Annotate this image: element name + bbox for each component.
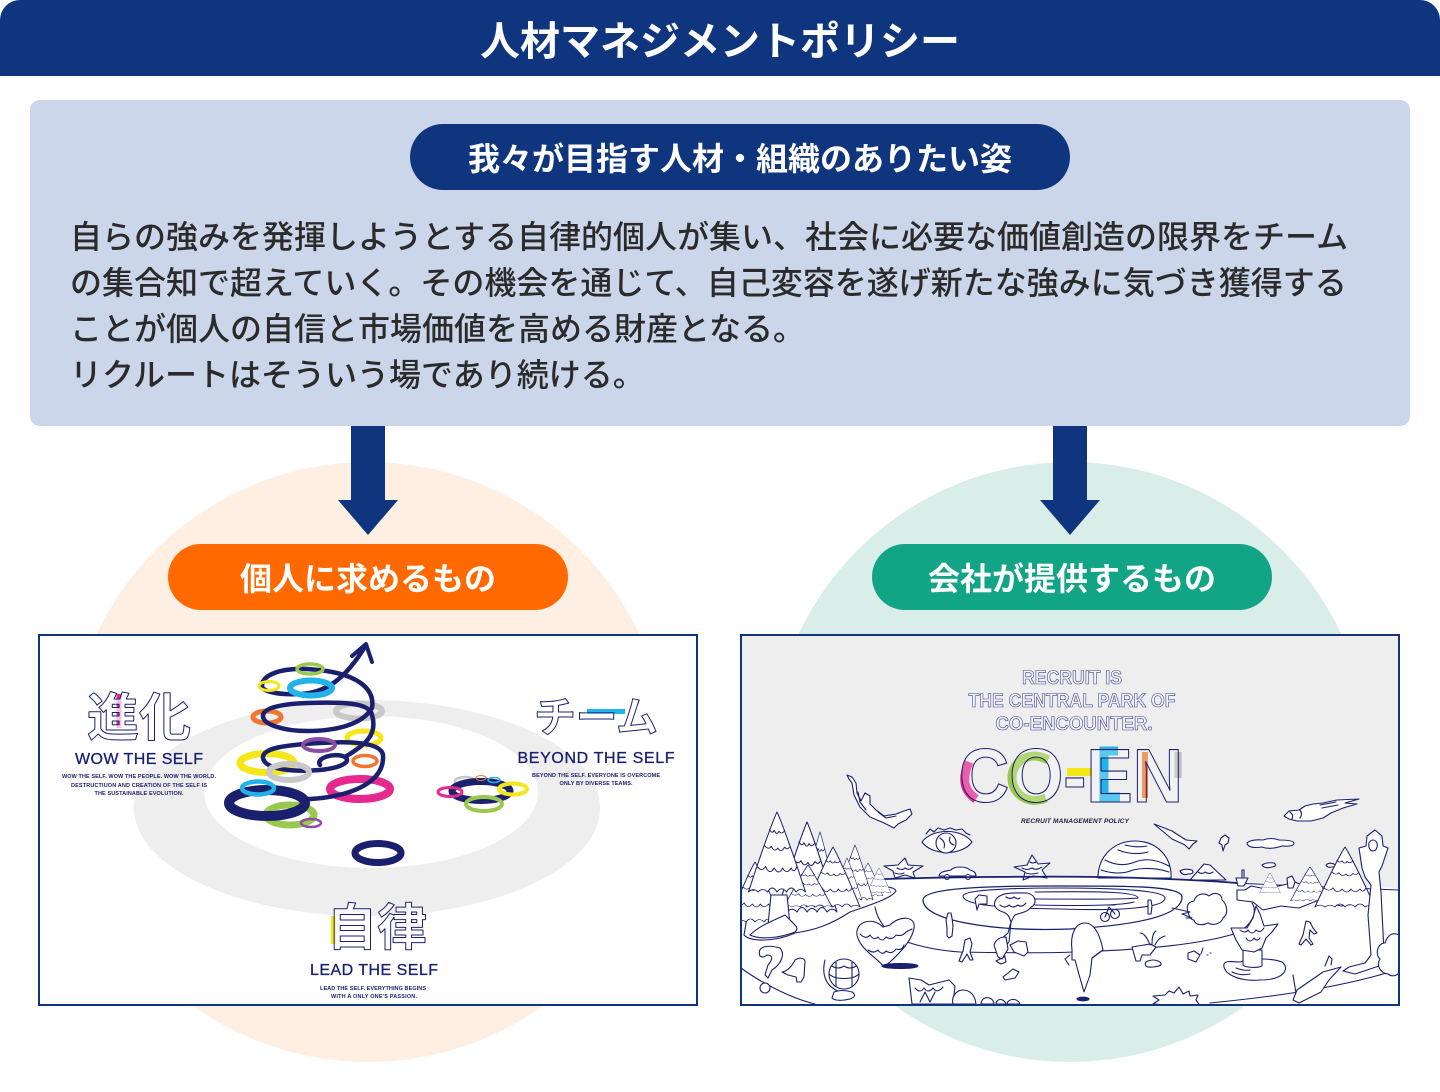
bottom blobs bbox=[909, 978, 1020, 1004]
heart bbox=[857, 918, 918, 968]
dome sculpture and shadow bbox=[1065, 923, 1103, 1001]
people bbox=[946, 895, 1317, 962]
melting trees bbox=[994, 893, 1035, 980]
heading pill: what the company provides bbox=[872, 544, 1272, 610]
puddle under the left mountains bbox=[744, 887, 896, 940]
label: evolution, wow the self: WOW THE SELF. WOW THE PEOPLE. WOW THE WORLD. bbox=[62, 774, 216, 780]
right background circle bbox=[770, 462, 1370, 1062]
mountains left bbox=[728, 812, 891, 938]
mountains right bbox=[1236, 847, 1375, 910]
label: team, beyond the self: BEYOND THE SELF bbox=[518, 750, 675, 767]
arrow: to company bbox=[1040, 426, 1100, 535]
panel: ideal people and organization bbox=[30, 100, 1410, 426]
panel: co-en park illustration bbox=[740, 634, 1400, 1006]
flying person right bbox=[1284, 799, 1359, 821]
lamp post and bush bbox=[1343, 830, 1399, 976]
tracks bbox=[741, 877, 1399, 1004]
crashed plane bbox=[1293, 956, 1341, 1003]
heading: recruit is the central park: RECRUIT IS bbox=[1022, 668, 1122, 689]
heading: recruit is the central park bbox=[968, 668, 1176, 735]
castle tree on puddle bbox=[1224, 906, 1286, 980]
vision text: の集合知で超えていく。その機会を通じて、自己変容を遂げ新たな強みに気づき獲得する bbox=[70, 265, 1347, 301]
spiral of rings bbox=[229, 644, 401, 862]
label: evolution, wow the self bbox=[62, 690, 216, 797]
label: autonomy, lead the self bbox=[310, 900, 438, 1000]
heading: recruit is the central park: CO-ENCOUNTER. bbox=[996, 714, 1152, 735]
illustration: park landscape bbox=[728, 775, 1399, 1007]
logo: co-en: CO-EN bbox=[959, 734, 1183, 819]
vision text: ことが個人の自信と市場価値を高める財産となる。 bbox=[70, 311, 805, 347]
label: autonomy, lead the self: WITH A ONLY ONE'S PASSION. bbox=[331, 994, 417, 1000]
fountain bbox=[1132, 931, 1165, 967]
heading pill bbox=[410, 124, 1070, 190]
label: autonomy, lead the self: LEAD THE SELF bbox=[310, 962, 438, 979]
title bbox=[0, 0, 1440, 76]
spiky shape bbox=[1153, 987, 1201, 1007]
title: 人材マネジメントポリシー bbox=[480, 20, 960, 64]
label: autonomy, lead the self: LEAD THE SELF. EVERYTHING BEGINS bbox=[320, 986, 426, 992]
label: evolution, wow the self: THE SUSTAINABLE EVOLUTION. bbox=[94, 791, 184, 797]
label: team, beyond the self: チーム bbox=[534, 694, 658, 741]
heading pill: what is required of individuals bbox=[168, 544, 568, 610]
heading: recruit is the central park: THE CENTRAL PARK OF bbox=[968, 691, 1176, 712]
vision text: 自らの強みを発揮しようとする自律的個人が集い、社会に必要な価値創造の限界をチーム bbox=[70, 219, 1348, 255]
vision text bbox=[70, 219, 1348, 393]
planet bbox=[1098, 841, 1171, 878]
label: evolution, wow the self: 進化 bbox=[87, 690, 191, 748]
heading pill: what is required of individuals: 個人に求めるもの bbox=[240, 561, 496, 597]
puff cloud bbox=[1172, 893, 1227, 925]
flying person left bbox=[847, 775, 912, 828]
question mark, bird, globe bbox=[759, 946, 859, 1000]
bike and dog bbox=[1100, 905, 1211, 962]
left background circle bbox=[68, 462, 668, 1062]
rocket, cloud, and sky details bbox=[1154, 824, 1335, 880]
vision text: リクルートはそういう場であり続ける。 bbox=[70, 357, 645, 393]
heading pill: what the company provides: 会社が提供するもの bbox=[928, 561, 1216, 597]
caption: recruit management policy: RECRUIT MANAGEMENT POLICY bbox=[1021, 818, 1130, 825]
label: evolution, wow the self: WOW THE SELF bbox=[75, 751, 203, 768]
label: evolution, wow the self: DESTRUCTIUON AND CREATION OF THE SELF IS bbox=[71, 783, 207, 789]
label: team, beyond the self: BEYOND THE SELF. EVERYONE IS OVERCOME bbox=[532, 773, 660, 779]
heading pill: 我々が目指す人材・組織のありたい姿 bbox=[468, 141, 1012, 177]
label: autonomy, lead the self: 自律 bbox=[327, 900, 427, 956]
eye bbox=[922, 828, 972, 853]
label: team, beyond the self bbox=[518, 694, 675, 787]
team rings bbox=[438, 776, 527, 811]
label: team, beyond the self: ONLY BY DIVERSE TEAMS. bbox=[560, 781, 633, 787]
panel: individual diagram bbox=[38, 634, 698, 1006]
arrow: to individual bbox=[338, 426, 398, 535]
stars and car bbox=[884, 855, 1050, 880]
